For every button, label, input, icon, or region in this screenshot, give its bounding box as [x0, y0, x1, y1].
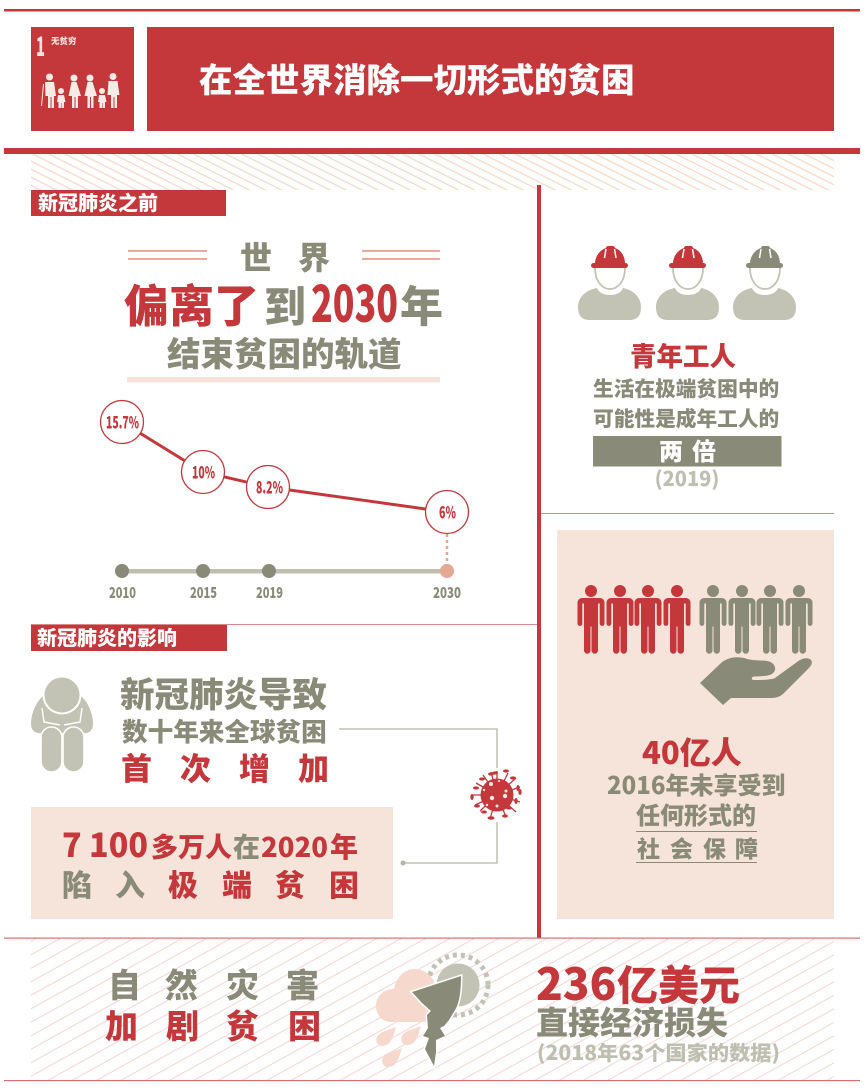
text: young workers: 青年工人: [630, 335, 736, 374]
icon: worker 1: [578, 246, 641, 320]
icon: eight people: [578, 585, 812, 654]
text: 4 billion: 保: [703, 830, 726, 864]
text: COVID first increase: 新冠肺炎导致: [120, 667, 327, 717]
text: COVID first increase: 增: [239, 744, 270, 789]
text: disasters: 贫: [226, 1000, 259, 1048]
headline: world off track: 界: [298, 233, 330, 279]
line chart: poverty rate: 2030: [433, 582, 461, 603]
text: 4 billion: 社: [637, 830, 660, 864]
SDG 1 icon tile: 1: [36, 27, 45, 64]
section tag: before COVID: 新冠肺炎之前: [38, 187, 158, 216]
section tag: COVID impact: 新冠肺炎的影响: [37, 622, 177, 651]
headline: world off track: 年: [400, 273, 443, 335]
text: disasters: 害: [286, 959, 319, 1007]
headline: world off track: 结束贫困的轨道: [167, 327, 402, 376]
panel: social protection: [557, 530, 834, 919]
headline: world off track: 偏离了: [124, 270, 259, 335]
icon: worker 2: [656, 246, 719, 320]
text: young workers: 生活在极端贫困中的: [593, 372, 779, 402]
SDG 1 icon tile: [31, 27, 134, 131]
panel: 71 million: 在: [233, 826, 260, 865]
text: COVID first increase: 次: [180, 744, 211, 789]
text: young workers: 两: [659, 432, 683, 467]
panel: 71 million: 困: [329, 861, 359, 905]
text: COVID first increase: [120, 667, 329, 789]
headline: world off track: [124, 233, 443, 382]
text: disasters: 加: [105, 1000, 138, 1048]
bottom panel: natural disasters: [4, 938, 860, 1081]
panel: 71 million: 入: [115, 861, 145, 905]
panel: 71 million: 多万人: [151, 826, 232, 865]
text: disasters: 剧: [166, 1000, 199, 1048]
divider lines: [31, 185, 834, 938]
text: 4 billion: 障: [735, 830, 758, 864]
text: disasters: 自: [108, 959, 141, 1007]
icon: virus: [470, 769, 522, 820]
icon: open hand: [700, 657, 812, 705]
icon: storm: [376, 955, 488, 1067]
top rule: [4, 9, 860, 12]
text: young workers: (2019): [655, 463, 719, 492]
text: young workers: 可能性是成年工人的: [593, 402, 779, 432]
line chart: poverty rate: 2010: [109, 582, 136, 603]
icon: family: [42, 73, 120, 108]
text: COVID first increase: 数十年来全球贫困: [122, 712, 327, 749]
text: 23.6 billion: [536, 949, 780, 1066]
headline: world off track: 到: [264, 274, 306, 335]
line chart: poverty rate: 8.2%: [256, 474, 283, 498]
title banner: [147, 27, 834, 131]
panel: 71 million: 端: [222, 861, 252, 905]
headline: world off track: 世: [240, 233, 272, 279]
text: 4 billion: [607, 728, 785, 864]
hatched strip: [31, 154, 834, 190]
text: 23.6 billion: 亿美元: [617, 952, 740, 1012]
text: 23.6 billion: (2018年63个国家的数据): [537, 1037, 780, 1066]
text: disasters: [105, 959, 321, 1048]
text: young workers: [593, 335, 782, 492]
text: 4 billion: 会: [670, 830, 693, 864]
connector: [339, 729, 497, 866]
text: COVID first increase: 加: [298, 744, 329, 789]
panel: 71 million: [31, 807, 393, 919]
line chart: poverty rate: 2019: [256, 582, 283, 603]
text: 23.6 billion: 直接经济损失: [536, 998, 728, 1044]
section tag: before COVID: [31, 187, 226, 216]
panel: 71 million: 2020: [261, 826, 328, 865]
title banner: 在全世界消除一切形式的贫困: [199, 53, 634, 102]
text: disasters: 困: [288, 1000, 321, 1048]
panel: 71 million: 极: [168, 861, 198, 905]
line chart: poverty rate: 2015: [190, 582, 217, 603]
headline: world off track: 2030: [311, 265, 398, 337]
text: young workers: 倍: [692, 432, 716, 467]
SDG 1 icon tile: 无贫穷: [51, 35, 77, 47]
panel: 71 million: 年: [330, 826, 358, 866]
text: disasters: 灾: [226, 959, 259, 1007]
header bar: [4, 148, 860, 154]
panel: 71 million: 贫: [275, 861, 305, 905]
line chart: poverty rate: 6%: [439, 498, 456, 524]
text: 4 billion: 40亿人: [642, 728, 742, 773]
panel: 71 million: 陷: [62, 861, 92, 905]
text: 4 billion: 2016年未享受到: [607, 766, 785, 801]
text: 23.6 billion: 236: [536, 949, 616, 1013]
icons: three young workers: [578, 246, 796, 320]
text: 4 billion: 任何形式的: [636, 796, 756, 831]
panel: 71 million: 7 100: [62, 819, 148, 867]
text: COVID first increase: 首: [121, 744, 152, 789]
icon: seated person: [31, 676, 93, 772]
line chart: poverty rate: [100, 400, 468, 603]
text: disasters: 然: [165, 959, 198, 1007]
line chart: poverty rate: 15.7%: [106, 408, 139, 434]
line chart: poverty rate: 10%: [192, 458, 215, 484]
icon: worker 3: [733, 246, 796, 320]
